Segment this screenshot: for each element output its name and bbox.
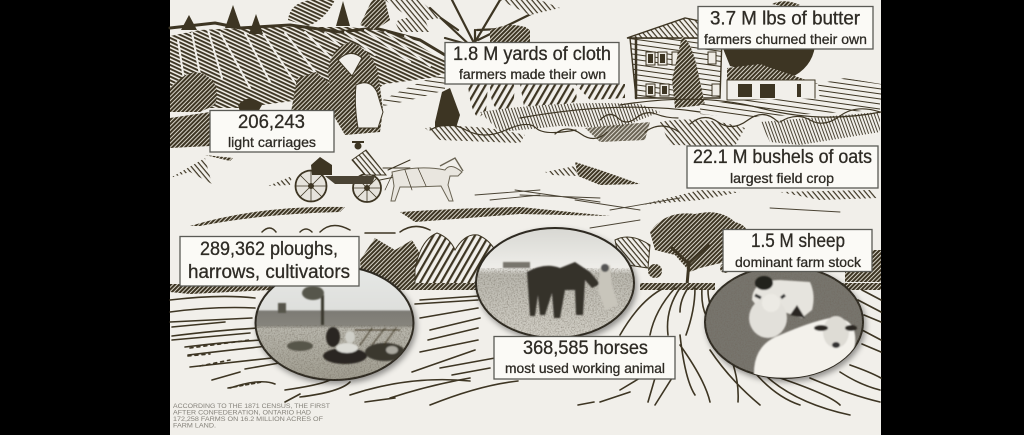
illustration: ploughed furrows [170, 288, 881, 415]
icon: conifers on the skyline [181, 1, 350, 34]
label: butter: 3.7 M lbs of butter [710, 8, 861, 30]
infographic: 1871 Ontario farm census [168, 0, 882, 435]
label: yards of cloth [445, 42, 619, 84]
label: bushels of oats [687, 146, 878, 188]
illustration: central shrubs [170, 42, 460, 148]
label: light carriages: 206,243 [238, 112, 305, 133]
photo: horses oval [470, 228, 640, 342]
label: horses: 368,585 horses [523, 338, 648, 359]
label: ploughs, harrows, cultivators: harrows, cultivators [188, 262, 350, 283]
illustration: tree line in the middle distance [170, 212, 881, 294]
illustration: dark tree behind house [722, 1, 815, 78]
label: sheep: 1.5 M sheep [751, 231, 845, 252]
footnote: AFTER CONFEDERATION, ONTARIO HAD [173, 410, 311, 416]
label: butter [698, 6, 873, 49]
label: butter: farmers churned their own [704, 31, 867, 47]
illustration: vineyard hillside [170, 23, 450, 112]
label: light carriages: light carriages [228, 134, 316, 150]
illustration: bushes at hilltop [288, 0, 430, 32]
illustration: garden scribbles below the house [425, 99, 881, 146]
paper panel [170, 0, 881, 435]
footnote [173, 403, 330, 430]
label: horses: most used working animal [505, 360, 665, 376]
label: sheep: dominant farm stock [735, 254, 862, 270]
label: yards of cloth: farmers made their own [459, 66, 606, 82]
photo: sheep oval [700, 262, 870, 382]
label: horses [494, 336, 675, 379]
footnote: 172,258 FARMS ON 16.2 MILLION ACRES OF [173, 416, 323, 423]
footnote: FARM LAND. [173, 422, 216, 430]
label: sheep [723, 230, 872, 272]
illustration: farmhouse [627, 18, 881, 108]
label: light carriages [210, 110, 334, 152]
label: bushels of oats: 22.1 M bushels of oats [693, 147, 872, 168]
illustration: grass strokes [170, 155, 878, 228]
label: yards of cloth: 1.8 M yards of cloth [453, 44, 611, 65]
photo: field machinery oval [250, 266, 420, 385]
illustration: large tree [385, 0, 625, 118]
illustration: horse and carriage [296, 141, 463, 202]
label: ploughs, harrows, cultivators: 289,362 ploughs, [200, 239, 338, 260]
footnote: ACCORDING TO THE 1871 CENSUS, THE FIRST [173, 403, 330, 410]
label: ploughs, harrows, cultivators [180, 236, 359, 286]
label: bushels of oats: largest field crop [730, 170, 834, 186]
